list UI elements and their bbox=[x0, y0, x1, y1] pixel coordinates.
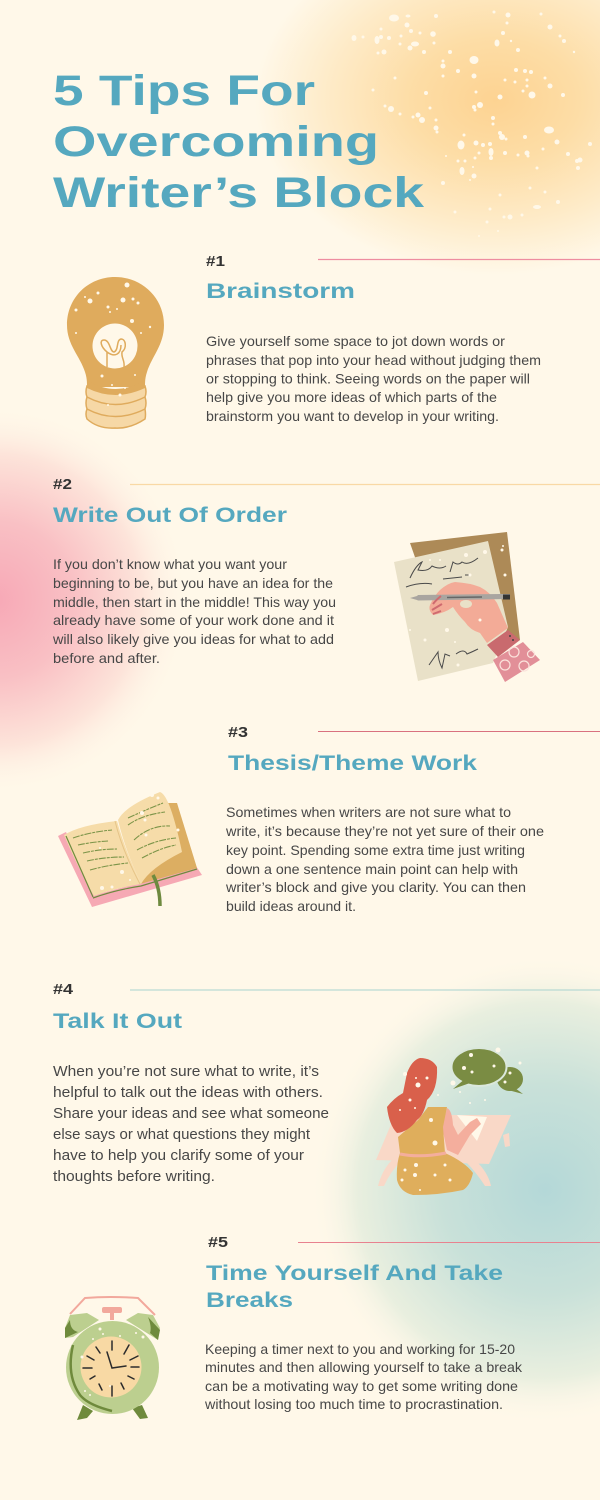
body 5 bbox=[204, 1341, 523, 1412]
body 1: phrases that pop into your head without judging them bbox=[206, 352, 541, 368]
body 2: middle, then start in the middle! This way you bbox=[53, 594, 336, 610]
number 5: #5 bbox=[208, 1235, 228, 1251]
paint splatter bbox=[352, 10, 592, 237]
body 5: without losing too much time to procrastination. bbox=[204, 1396, 503, 1412]
hair bbox=[387, 1058, 437, 1133]
body 5: minutes and then allowing yourself to take a break bbox=[205, 1359, 523, 1375]
body 5: Keeping a timer next to you and working for 15-20 bbox=[205, 1341, 515, 1357]
heading 5: Breaks bbox=[206, 1289, 293, 1312]
body 3: write, it’s because they’re not yet sure of their one bbox=[225, 823, 544, 839]
body 3: key point. Spending some extra time just writing bbox=[226, 842, 525, 858]
icon: open book bbox=[58, 792, 202, 907]
body 2: If you don’t know what you want your bbox=[53, 556, 287, 572]
title: Writer’s Block bbox=[53, 169, 424, 217]
body 1: help give you more ideas of which parts of the bbox=[206, 389, 497, 405]
body 3: build ideas around it. bbox=[226, 898, 356, 914]
body 4: Share your ideas and see what someone bbox=[53, 1106, 329, 1122]
icon: woman at desk with speech bubbles bbox=[376, 1048, 523, 1195]
heading 5: Time Yourself And Take bbox=[206, 1262, 503, 1285]
tip 4 panel bbox=[53, 982, 600, 1185]
number 1: #1 bbox=[206, 254, 225, 270]
title: Overcoming bbox=[53, 118, 379, 166]
body 4: else says or what questions they might bbox=[53, 1127, 310, 1143]
body 3: Sometimes when writers are not sure what to bbox=[226, 804, 511, 820]
heading 1: Brainstorm bbox=[206, 280, 355, 303]
icon: hand writing on paper bbox=[394, 532, 540, 682]
body 1 bbox=[206, 333, 541, 424]
tip 1 panel bbox=[206, 254, 600, 424]
number 4: #4 bbox=[53, 982, 73, 998]
body 4: have to help you clarify some of your bbox=[53, 1148, 304, 1164]
desk and legs bbox=[378, 1160, 402, 1186]
speech bubbles bbox=[452, 1048, 523, 1094]
title bbox=[53, 67, 424, 217]
tip 3 panel bbox=[225, 725, 600, 914]
orange glow bbox=[250, 0, 600, 280]
icon: light bulb bbox=[67, 277, 164, 428]
body 1: or stopping to think. Seeing words on the paper will bbox=[206, 370, 530, 386]
body 2: already have some of your work done and it bbox=[53, 612, 334, 628]
icon: alarm clock bbox=[65, 1297, 160, 1420]
title: 5 Tips For bbox=[53, 67, 315, 115]
body 4: helpful to talk out the ideas with others. bbox=[53, 1085, 323, 1101]
dress bbox=[397, 1107, 473, 1195]
heading 2: Write Out Of Order bbox=[53, 504, 287, 527]
body 3: down a one sentence main point can help with bbox=[226, 861, 518, 877]
arm bbox=[442, 1108, 481, 1155]
body 4: When you’re not sure what to write, it’s bbox=[53, 1064, 319, 1080]
number 3: #3 bbox=[228, 725, 248, 741]
body 1: Give yourself some space to jot down words or bbox=[206, 333, 505, 349]
pink glow bbox=[0, 400, 200, 800]
heading 3: Thesis/Theme Work bbox=[228, 752, 477, 775]
tip 2 panel bbox=[52, 477, 600, 666]
body 3: writer’s block and give you clarity. You can then bbox=[225, 879, 526, 895]
body 4 bbox=[53, 1064, 329, 1185]
number 2: #2 bbox=[53, 477, 72, 493]
heading 4: Talk It Out bbox=[53, 1010, 182, 1033]
body 2: will also likely give you ideas for what to add bbox=[52, 631, 334, 647]
body 2: beginning to be, but you have an idea for the bbox=[53, 575, 333, 591]
body 4: thoughts before writing. bbox=[53, 1169, 215, 1185]
heading 5 bbox=[206, 1262, 503, 1312]
body 3 bbox=[225, 804, 544, 914]
body 1: brainstorm you want to develop in your writing. bbox=[206, 408, 499, 424]
teal glow bbox=[300, 950, 600, 1430]
body 2: before and after. bbox=[53, 650, 160, 666]
body 2 bbox=[52, 556, 336, 666]
tip 5 panel bbox=[204, 1235, 600, 1412]
body 5: can be a motivating way to get some writing done bbox=[205, 1378, 518, 1394]
